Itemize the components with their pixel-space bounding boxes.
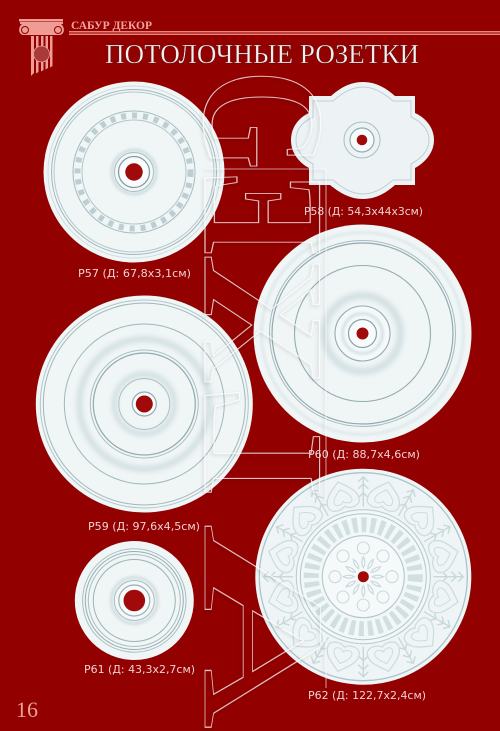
header rule (69, 31, 500, 35)
watermark: outlined lettering: L (167, 386, 361, 495)
rosette P60 (254, 224, 472, 442)
rosette P59 (36, 296, 253, 512)
watermark: outlined lettering (166, 70, 361, 730)
rosette P57 (44, 82, 224, 262)
rosette P58 (291, 82, 434, 199)
page number: 16 (16, 697, 38, 722)
watermark: outlined lettering: E (166, 170, 360, 255)
watermark: outlined lettering: G (166, 70, 360, 170)
brand name: САБУР ДЕКОР (71, 18, 152, 32)
rosette P62 (255, 469, 471, 685)
icon: column logo (19, 19, 64, 76)
title: ПОТОЛОЧНЫЕ РОЗЕТКИ (105, 39, 419, 69)
label P59: Р59 (Д: 97,6x4,5см) (88, 521, 200, 533)
label P61: Р61 (Д: 43,3x2,7см) (84, 664, 195, 676)
label P60: Р60 (Д: 88,7x4,6см) (308, 449, 420, 461)
rosette P61 (75, 541, 194, 660)
watermark: outlined lettering: X (167, 255, 360, 385)
watermark: outlined lettering: A (167, 524, 360, 730)
label P58: Р58 (Д: 54,3x44x3см) (304, 206, 423, 218)
label P57: Р57 (Д: 67,8x3,1см) (78, 268, 191, 280)
label P62: Р62 (Д: 122,7x2,4см) (308, 690, 426, 702)
